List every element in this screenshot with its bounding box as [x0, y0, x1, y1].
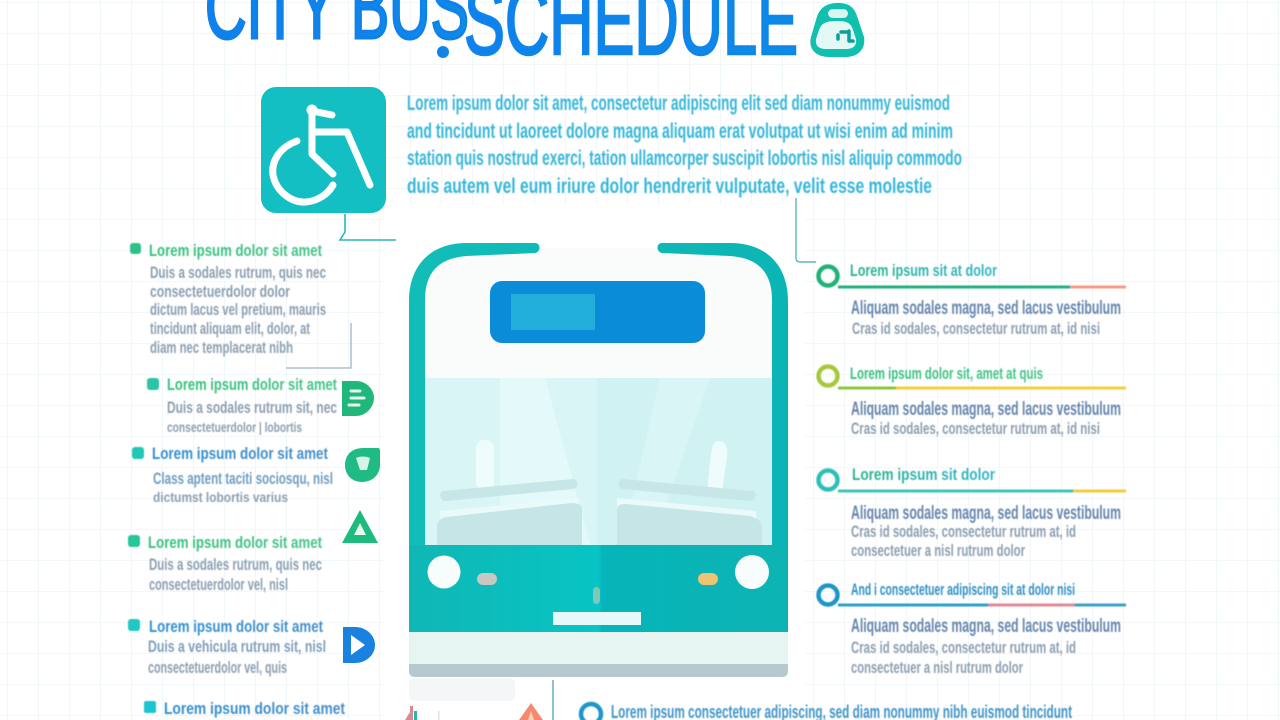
- icon: green warning triangle: [342, 510, 378, 543]
- marker light right: [698, 573, 718, 585]
- left connector: [286, 323, 351, 368]
- right item 2: Lorem ipsum dolor sit, amet at quis: [850, 364, 1043, 383]
- bottom small chart: [405, 706, 440, 720]
- licence plate: [553, 612, 641, 625]
- left item 1: [130, 241, 326, 357]
- right item 3: Cras id sodales, consectetur rutrum at, id: [851, 522, 1076, 541]
- icon: bus badge next to title: [810, 3, 864, 57]
- right item 2: [818, 364, 1126, 438]
- right item 3: Lorem ipsum sit dolor: [852, 465, 995, 484]
- bus shadow: [409, 678, 515, 701]
- left item 2: Duis a sodales rutrum sit, nec: [167, 398, 337, 417]
- bus roof frame: [409, 243, 788, 545]
- left item 1: tincidunt aliquam elit, dolor, at: [150, 319, 310, 338]
- left item 2: [147, 375, 337, 435]
- icon: blue play badge: [343, 627, 375, 663]
- destination sign: [490, 281, 705, 343]
- left item 1: Duis a sodales rutrum, quis nec: [150, 263, 326, 282]
- bottom connector: [552, 680, 554, 720]
- right item 2: Aliquam sodales magna, sed lacus vestibulum: [851, 399, 1121, 420]
- right item 4: consectetuer a nisl rutrum dolor: [851, 658, 1023, 677]
- headlight right: [735, 555, 769, 589]
- left item 4: consectetuerdolor vel, nisl: [149, 575, 288, 594]
- left item 1: Lorem ipsum dolor sit amet: [149, 241, 322, 260]
- left item 4: [128, 533, 322, 594]
- icon: green shield badge: [345, 448, 380, 482]
- left item 3: [132, 444, 333, 505]
- left item 5: consectetuerdolor vel, quis: [148, 658, 287, 677]
- left item 3: dictumst lobortis varius: [153, 489, 288, 505]
- left item 2: consectetuerdolor | lobortis: [167, 419, 302, 435]
- right item 4: Cras id sodales, consectetur rutrum at, id: [851, 638, 1076, 657]
- bus lower body: [409, 545, 788, 632]
- left item 5: Lorem ipsum dolor sit amet: [149, 617, 323, 636]
- icon: bottom orange warning: [519, 703, 543, 720]
- intro text block: and tincidunt ut laoreet dolore magna aliquam erat volutpat ut wisi enim ad minim: [407, 120, 953, 143]
- left item 6: Lorem ipsum dolor sit amet: [164, 699, 345, 718]
- right item 4: Aliquam sodales magna, sed lacus vestibulum: [851, 616, 1121, 637]
- title: [205, 0, 798, 75]
- left item 5: Duis a vehicula rutrum sit, nisl: [148, 637, 326, 656]
- left item 4: Duis a sodales rutrum, quis nec: [149, 555, 322, 574]
- connector: wheelchair tile to bus: [340, 214, 396, 240]
- left item 2: Lorem ipsum dolor sit amet: [167, 375, 337, 394]
- right item 4: [818, 580, 1126, 677]
- connector: intro text to right column: [796, 198, 816, 262]
- right item 1: Lorem ipsum sit at dolor: [850, 261, 997, 280]
- intro text block: Lorem ipsum dolor sit amet, consectetur adipiscing elit sed diam nonummy euismod: [407, 92, 950, 115]
- right item 3: [818, 465, 1126, 560]
- right item 3: consectetuer a nisl rutrum dolor: [851, 541, 1025, 560]
- headlight left: [428, 556, 460, 588]
- intro text block: duis autem vel eum iriure dolor hendrerit vulputate, velit esse molestie: [407, 175, 932, 198]
- left item 3: Lorem ipsum dolor sit amet: [152, 444, 328, 463]
- left item 1: consectetuerdolor dolor: [150, 282, 290, 301]
- right item 2: Cras id sodales, consectetur rutrum at, id nisi: [851, 419, 1100, 438]
- left item 1: dictum lacus vel pretium, mauris: [150, 300, 326, 319]
- icon: accessibility wheelchair tile: [261, 87, 386, 213]
- bumper: [409, 632, 788, 677]
- intro text block: [407, 92, 962, 198]
- left item 4: Lorem ipsum dolor sit amet: [148, 533, 322, 552]
- icon: green play badge: [342, 381, 374, 416]
- right item 1: Cras id sodales, consectetur rutrum at, id nisi: [852, 319, 1100, 338]
- left item 3: Class aptent taciti sociosqu, nisl: [153, 469, 333, 488]
- bottom item: [581, 702, 1072, 720]
- bus illustration: [409, 243, 788, 701]
- bus face: [425, 248, 772, 380]
- left item 1: diam nec templacerat nibh: [150, 338, 293, 357]
- left item 5: [128, 617, 326, 677]
- intro text block: station quis nostrud exerci, tation ullamcorper suscipit lobortis nisl aliquip commodo: [407, 147, 962, 170]
- right item 4: And i consectetuer adipiscing sit at dolor nisi: [851, 580, 1075, 599]
- windshield: [425, 378, 772, 545]
- right item 3: Aliquam sodales magna, sed lacus vestibulum: [851, 503, 1121, 524]
- right item 1: Aliquam sodales magna, sed lacus vestibulum: [851, 298, 1121, 319]
- right item 1: [818, 261, 1126, 338]
- marker light left: [477, 573, 497, 585]
- emblem: [593, 587, 600, 604]
